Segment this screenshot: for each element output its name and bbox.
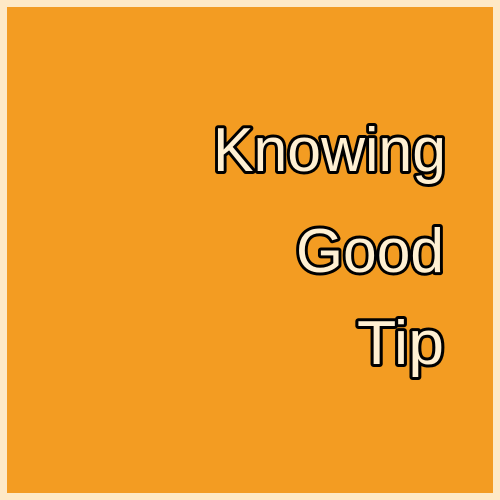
title line: Knowing: Knowing	[213, 116, 446, 185]
title line: Tip: Tip	[357, 309, 444, 378]
title	[213, 116, 446, 378]
title line: Good: Good	[296, 217, 444, 286]
